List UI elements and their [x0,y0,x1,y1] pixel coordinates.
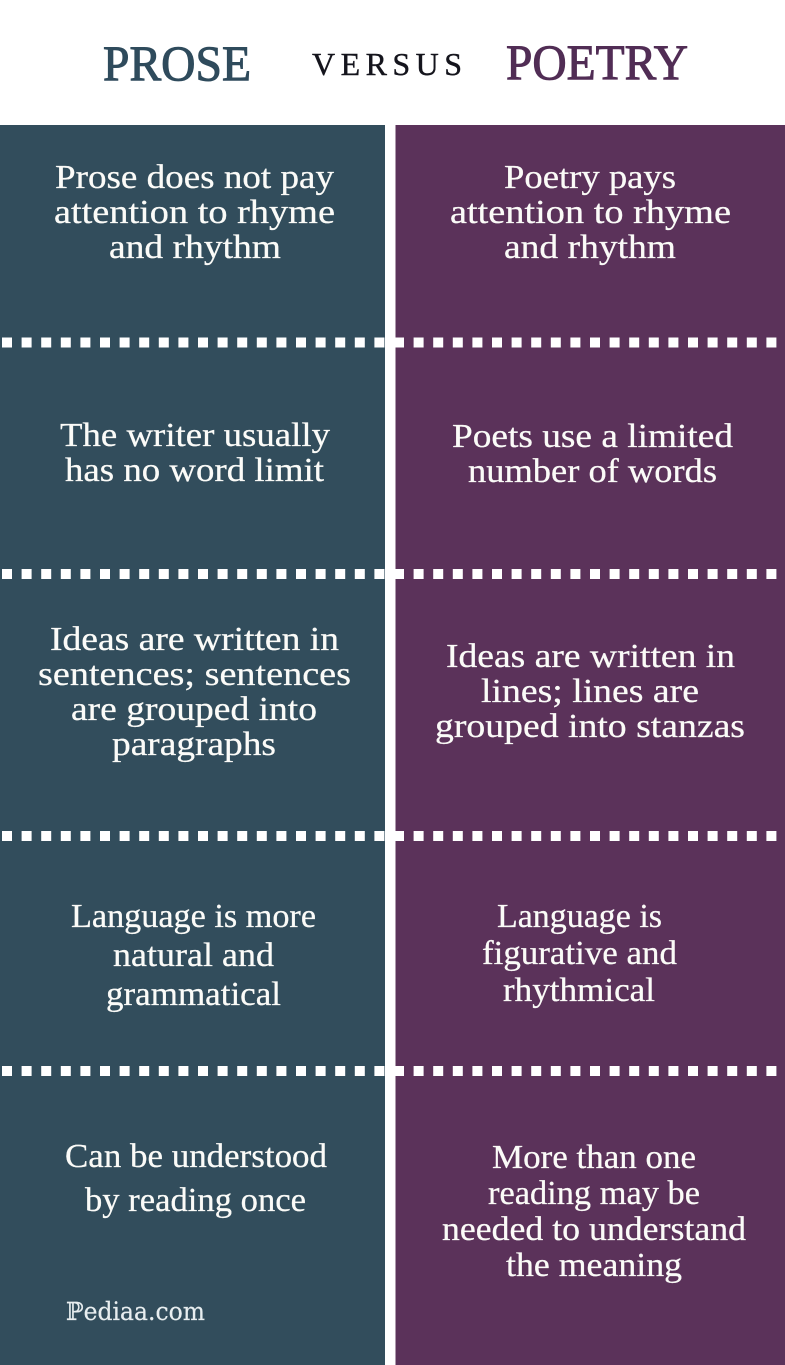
text: prose structure: Ideas are written in [50,621,339,658]
text: poetry language: Language is [497,898,662,935]
text: prose rhyme: attention to rhyme [54,194,335,231]
text: poetry language: rhythmical [503,972,655,1009]
text: poetry language [482,898,677,1009]
dotted divider row 2 [2,569,777,579]
text: prose reading: by reading once [85,1182,306,1219]
text: prose word limit: The writer usually [60,417,330,454]
text: prose rhyme: Prose does not pay [55,159,334,196]
text: poetry reading: More than one [492,1139,696,1176]
dotted divider row 1 [2,338,777,348]
text: prose language [71,898,316,1013]
text: prose language: natural and [113,937,274,974]
text: poetry structure: grouped into stanzas [435,708,745,745]
title: prose: PROSE [103,35,251,91]
title: poetry: POETRY [506,34,688,90]
text: poetry rhyme: attention to rhyme [450,194,731,231]
logo: Pediaa.com: ℙediaa.com [66,1297,205,1326]
dotted divider row 3 [2,831,777,841]
text: poetry structure [435,638,745,745]
text: poetry word limit: number of words [468,453,717,490]
text: poetry reading: the meaning [506,1247,682,1284]
text: prose reading: Can be understood [65,1138,327,1175]
text: prose rhyme [54,159,335,266]
text: poetry rhyme [450,159,731,266]
text: prose language: grammatical [106,976,281,1013]
text: poetry reading: reading may be [488,1175,700,1212]
text: prose rhyme: and rhythm [109,229,281,266]
panel: poetry column [396,125,785,1365]
text: poetry word limit: Poets use a limited [452,418,733,455]
text: poetry rhyme: Poetry pays [504,159,676,196]
text: prose word limit: has no word limit [65,452,325,489]
text: prose structure: sentences; sentences [38,656,351,693]
text: poetry language: figurative and [482,935,677,972]
panel: prose column [0,125,385,1365]
dotted divider row 4 [2,1066,777,1076]
text: prose structure [38,621,351,763]
text: prose word limit [60,417,330,489]
text: poetry structure: lines; lines are [481,673,699,710]
text: poetry rhyme: and rhythm [504,229,676,266]
text: prose language: Language is more [71,898,316,935]
text: poetry reading [442,1139,746,1284]
text: poetry structure: Ideas are written in [446,638,735,675]
text: prose structure: are grouped into [71,691,317,728]
text: prose reading [65,1138,327,1219]
title: versus: VERSUS [312,46,462,82]
text: poetry word limit [452,418,733,490]
text: poetry reading: needed to understand [442,1211,746,1248]
text: prose structure: paragraphs [112,726,276,763]
